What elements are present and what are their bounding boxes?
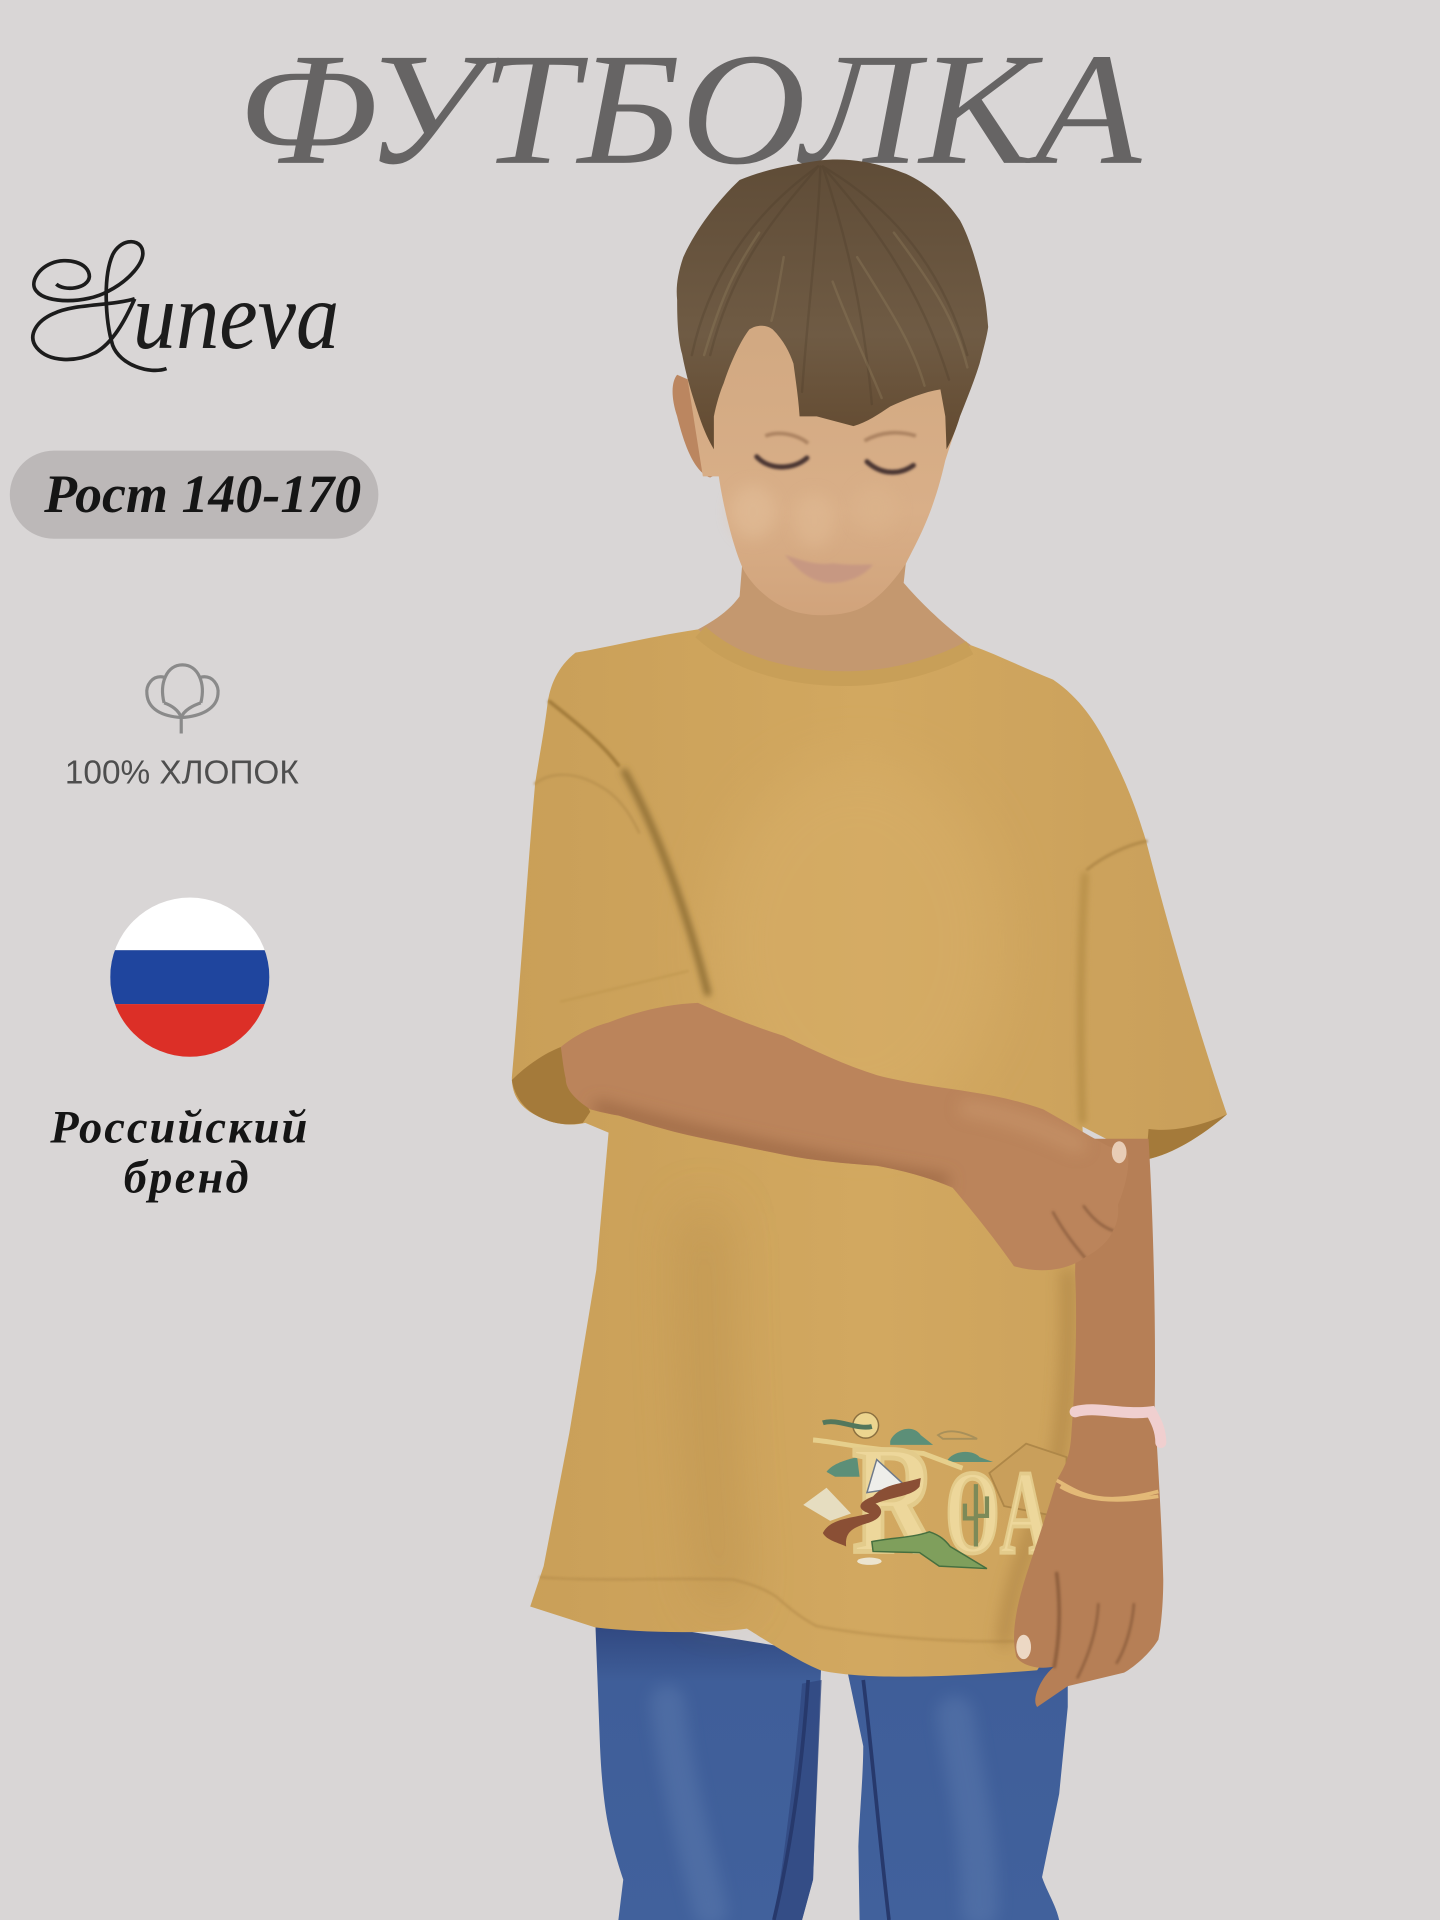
- t-shirt: [512, 629, 1227, 1677]
- ear: [673, 375, 722, 478]
- folded forearm and hand: [561, 1003, 1128, 1270]
- brand origin text: бренд: [124, 1153, 249, 1204]
- brand origin text: [49, 1102, 307, 1204]
- shirt print: ROAD graphic: R: [852, 1412, 939, 1585]
- forearm shading: [600, 1108, 1113, 1258]
- yellow bracelet: [1057, 1480, 1158, 1500]
- shirt shading: [535, 702, 1146, 1641]
- face highlights: [731, 433, 916, 547]
- hanging arm and hand: [1014, 1139, 1163, 1707]
- neck: [698, 539, 971, 683]
- height badge: Рост 140-170: [43, 464, 361, 524]
- brand logo: Luneva: [33, 242, 339, 370]
- thumb nail: [1016, 1635, 1031, 1659]
- hanging arm shading: [1054, 1573, 1134, 1678]
- cotton icon: [147, 665, 218, 733]
- title: ФУТБОЛКА: [238, 20, 1142, 198]
- jeans: [595, 1616, 1068, 1920]
- brand logo: Luneva: Luneva: [131, 263, 339, 369]
- face: [686, 306, 980, 615]
- hair: [677, 159, 988, 449]
- fingernail: [1112, 1141, 1127, 1163]
- collar band: [700, 632, 970, 679]
- mouth: [785, 555, 873, 583]
- boy figure: [512, 159, 1227, 1920]
- brand origin text: Российский: [49, 1102, 307, 1153]
- left sleeve inner: [512, 1047, 590, 1124]
- shirt print: ROAD graphic: OA: [945, 1446, 1051, 1579]
- cotton label: 100% ХЛОПОК: [65, 755, 300, 792]
- height badge: [10, 451, 378, 539]
- shirt print: ROAD graphic: [803, 1412, 1067, 1585]
- russian flag: [110, 898, 269, 1058]
- eyes: [757, 457, 913, 472]
- pink bracelet: [1075, 1410, 1161, 1442]
- right sleeve inner: [1146, 1114, 1227, 1160]
